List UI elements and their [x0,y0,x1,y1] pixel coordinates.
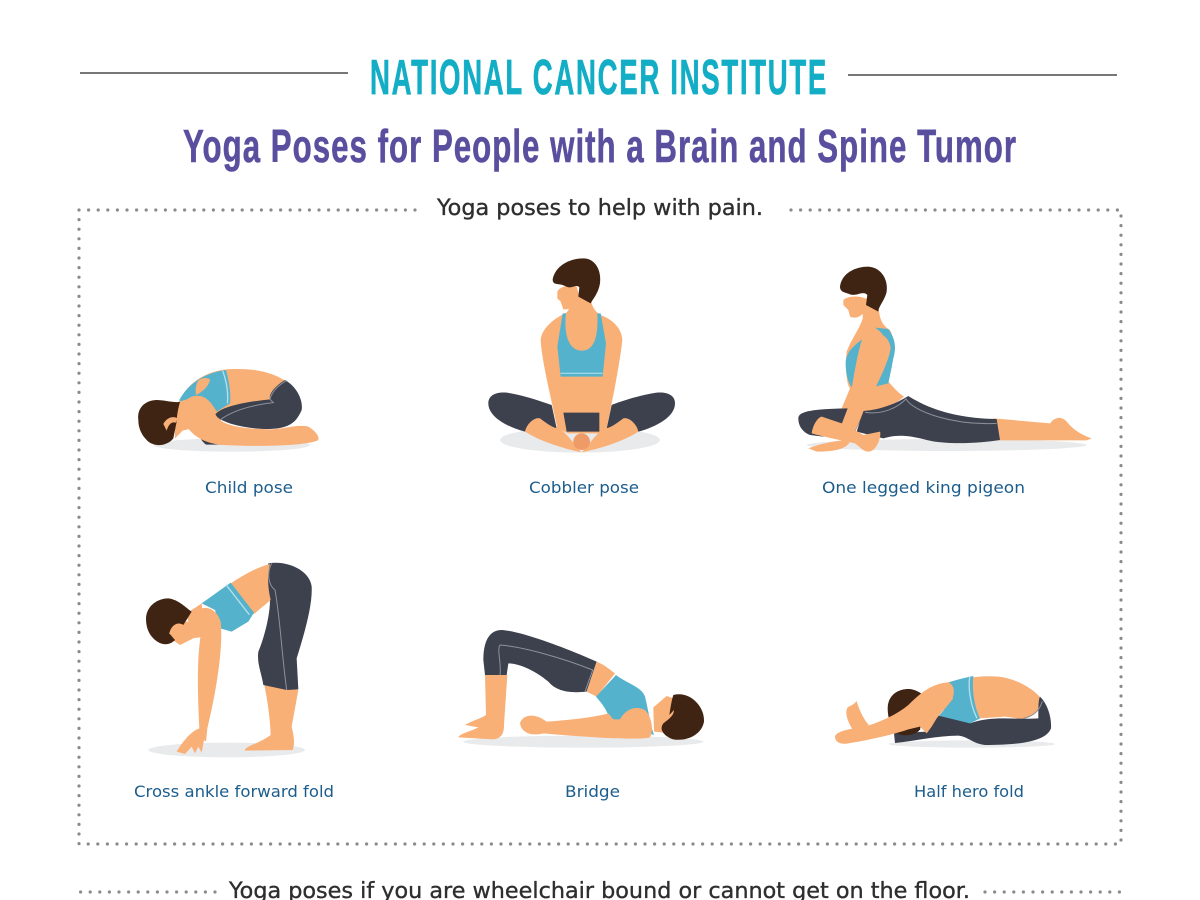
label: one legged king pigeon: One legged king pigeon [822,478,1025,497]
illustration: one legged king pigeon [798,267,1092,452]
panel: yoga poses to help with pain [79,196,1121,844]
panel: wheelchair poses heading [79,879,1121,900]
label: cobbler pose: Cobbler pose [529,478,639,497]
illustration: cobbler pose [488,258,675,453]
illustration: child pose [138,369,319,452]
panel heading: Yoga poses to help with pain. [436,196,763,221]
label: child pose: Child pose [205,478,293,497]
illustration: bridge [458,630,704,748]
label: half hero fold: Half hero fold [914,782,1024,801]
label: bridge: Bridge [565,782,620,801]
title: National Cancer Institute: NATIONAL CANCER INSTITUTE [370,51,828,105]
illustration: half hero fold [835,676,1055,748]
illustration: cross ankle forward fold [146,563,312,757]
label: cross ankle forward fold: Cross ankle forward fold [134,782,334,801]
